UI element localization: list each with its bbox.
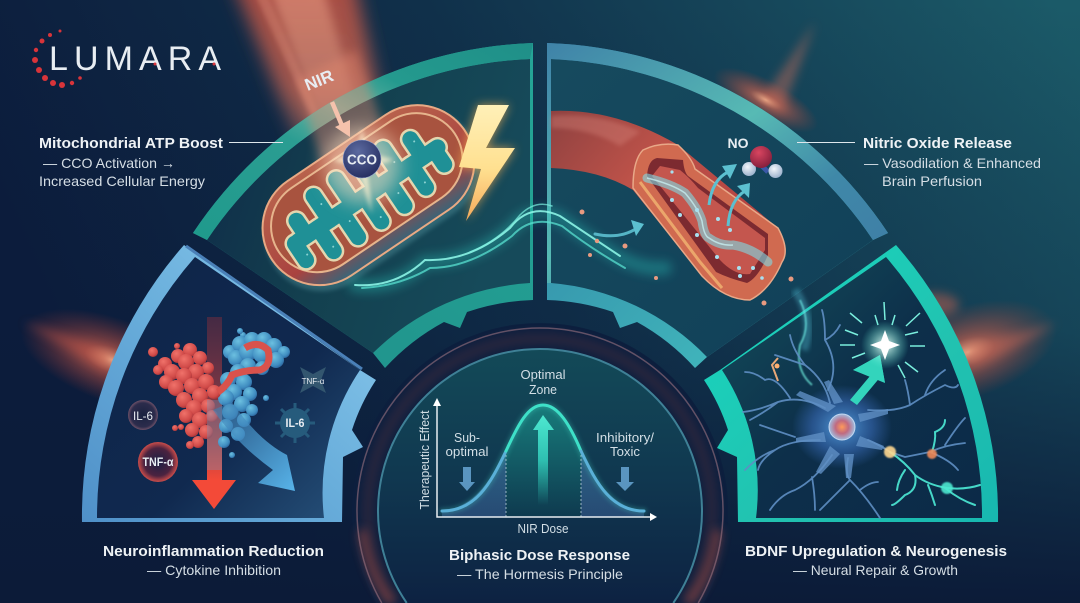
NIR arrow [332,102,350,137]
text: biphasic dose response: Biphasic Dose Response [449,547,630,564]
beam overlay on panel [296,50,395,172]
chart labels: Optimal [520,367,566,382]
central ring glow [352,323,728,603]
text: nitric oxide release [863,135,1041,189]
inner circle [378,349,702,603]
IL-6 faded bubble: IL-6 [133,409,153,423]
panel frame [704,245,998,522]
panel: nitric oxide release [547,43,888,368]
text: neuroinflammation reduction: — Cytokine Inhibition [147,562,281,578]
chart labels: Therapeutic Effect [417,410,432,510]
NO label: NO [728,135,749,151]
connector line [797,142,855,144]
red inhibition arrow shaft [192,317,236,509]
panel: mitochondrial ATP boost [193,43,533,368]
TNF-alpha faint cytokine [300,367,326,393]
panel frame: teal band [193,43,533,368]
red protein [148,343,221,449]
chart fills [442,405,644,517]
blue reduction arrow [213,402,295,491]
chart labels: optimal [446,444,489,459]
IL-6 spiky cytokine [275,403,315,443]
chart labels: NIR Dose [518,521,568,536]
suboptimal arrow [459,467,475,491]
red protein strand [218,344,269,392]
IL-6 faded bubble [128,400,158,430]
logo: Lumara [32,30,226,88]
panel interior: mitochondrion [207,59,530,353]
neuron [743,310,980,518]
text: nitric oxide release: Nitric Oxide Release [863,135,1012,152]
top edge line [186,246,362,369]
NO molecule [742,146,782,178]
CCO marker [343,140,381,178]
chart labels: Toxic [610,444,640,459]
protein overlap tint [207,400,222,470]
panel: neuroinflammation reduction [82,245,376,522]
lightning bolt [459,105,515,221]
panel: biphasic dose response chart [378,349,702,603]
text: BDNF upregulation [745,543,1007,578]
text: mitochondrial ATP boost [39,135,223,189]
chart labels: Zone [529,382,557,397]
mitochondrion [239,82,501,313]
text: neuroinflammation reduction: Neuroinflammation Reduction [103,543,324,560]
text: nitric oxide release: — Vasodilation & Enhanced [864,155,1041,171]
blood vessel [551,111,785,300]
near-infrared beam [228,0,395,170]
logo wordmark: LUMARA [49,40,226,78]
logo accent dots [154,62,216,66]
panel interior: vessel [551,59,873,357]
TNF-alpha bubble [138,442,178,482]
outer teal arc [193,43,533,240]
inhibitory arrow [616,467,634,491]
blue protein [218,328,290,458]
panel frame: blue band [547,43,888,368]
energy wave connecting panels [355,204,794,306]
panel frame [82,245,376,522]
text: BDNF upregulation: — Neural Repair & Growth [793,562,958,578]
text: neuroinflammation reduction [103,543,324,578]
CCO marker: CCO [347,152,377,168]
starburst [840,302,925,378]
connector line [229,142,283,144]
NIR label: NIR [302,66,336,95]
growth arrow [850,355,885,405]
axes [433,398,657,521]
release arrows [709,164,750,226]
IL-6 spiky cytokine: IL-6 [286,418,304,430]
light stream [795,290,812,385]
logo dot ring [32,30,82,88]
dose response curve [442,405,644,511]
text: biphasic dose response: — The Hormesis Principle [457,566,623,582]
panel: BDNF upregulation [704,245,998,522]
orange light flares [7,22,1070,432]
panel interior [97,257,360,518]
chart labels: Inhibitory/ [596,430,654,445]
text: BDNF upregulation: BDNF Upregulation & Neurogenesis [745,543,1007,560]
optimal up arrow [533,415,554,505]
text: nitric oxide release: Brain Perfusion [882,173,982,189]
zone dividers [506,451,581,517]
panel interior [722,257,982,518]
TNF-alpha faint cytokine: TNF-α [302,377,325,386]
TNF-alpha bubble: TNF-α [142,455,174,469]
chart labels: Sub- [454,430,480,445]
text: biphasic dose response [449,547,630,582]
text: mitochondrial ATP boost: Increased Cellular Energy [39,173,205,189]
text: mitochondrial ATP boost: Mitochondrial ATP Boost [39,135,223,152]
CCO glow [324,127,400,214]
text: mitochondrial ATP boost: — CCO Activation → [43,155,175,171]
chart labels [417,367,654,536]
outer blue arc [547,43,888,283]
